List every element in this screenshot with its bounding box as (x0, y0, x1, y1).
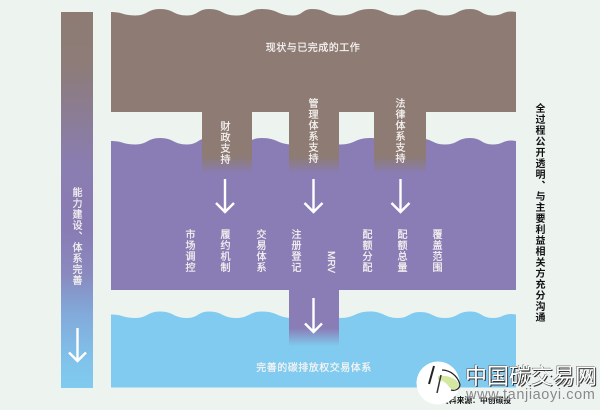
panel: lower purple stem (289, 283, 339, 346)
label: total allowance: 配额总量 (395, 229, 406, 273)
panel: capacity building bar (61, 12, 93, 388)
label: MRV: MRV (325, 251, 336, 273)
heading: complete ETS: 完善的碳排放权交易体系 (256, 363, 372, 374)
watermark: site name: 中国碳交易网 (465, 364, 597, 389)
arrow: capacity bar (69, 328, 86, 361)
panel: blue wave block (111, 312, 516, 388)
watermark: site url: www.tanjiaoyi.com (466, 387, 595, 403)
label: compliance mechanism: 履约机制 (218, 229, 229, 273)
panel: brown stems (202, 111, 426, 174)
label: trading system: 交易体系 (254, 229, 265, 273)
arrow: lower stem (305, 298, 322, 332)
arrow: financial support (216, 179, 234, 212)
label: coverage: 覆盖范围 (430, 229, 441, 273)
source note: 资料来源：中创碳投 (441, 396, 511, 405)
label: legal support: 法律体系支持 (393, 98, 404, 164)
heading: current status: 现状与已完成的工作 (266, 43, 360, 54)
label: allowance allocation: 配额分配 (360, 229, 371, 273)
side note: transparency: 全过程公开透明、与主要利益相关方充分沟通 (533, 103, 544, 323)
label: market regulation: 市场调控 (183, 229, 194, 273)
label: financial support: 财政支持 (218, 121, 229, 165)
label: capacity building: 能力建设、体系完善 (70, 187, 81, 286)
label: management support: 管理体系支持 (306, 98, 317, 164)
arrow: legal support (392, 179, 410, 212)
arrow: management support (304, 179, 322, 212)
panel: purple wave block (111, 138, 516, 290)
icon: watermark logo (416, 362, 461, 404)
label: registry: 注册登记 (289, 229, 300, 273)
panel: brown wave block (111, 9, 516, 112)
